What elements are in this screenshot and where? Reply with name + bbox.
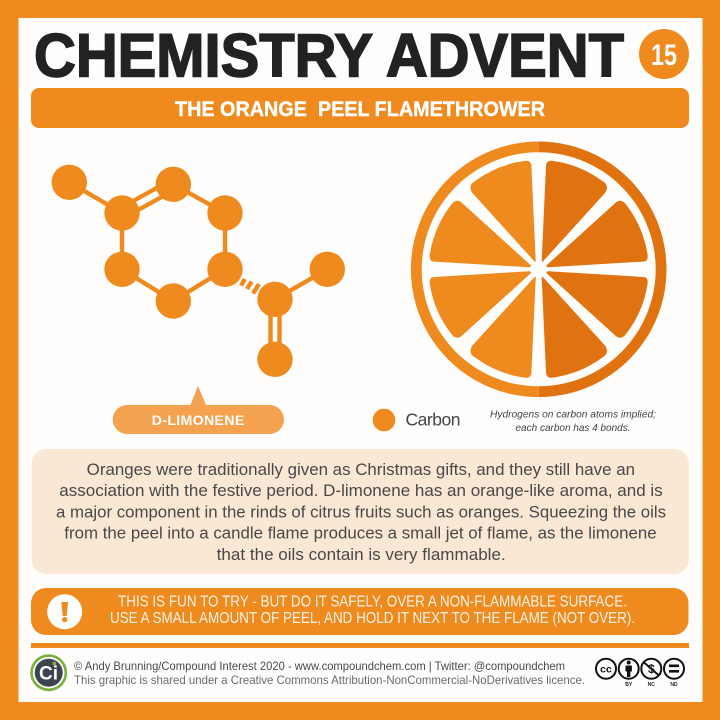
icon: exclamation mark xyxy=(47,594,82,629)
icon: creative commons licence badges: BY xyxy=(625,682,633,688)
footer credits xyxy=(74,659,585,687)
panel: description text: from the peel into a candle flame produces a small jet of flame, as the limonene xyxy=(64,525,657,543)
note: implied hydrogens: each carbon has 4 bonds. xyxy=(516,422,630,434)
icon: creative commons licence badges xyxy=(596,659,684,688)
panel: description text: that the oils contain is very flammable. xyxy=(217,546,506,564)
day number badge: 15 xyxy=(651,39,677,72)
warning banner: THIS IS FUN TO TRY - BUT DO IT SAFELY, OVER A NON-FLAMMABLE SURFACE. xyxy=(118,594,627,611)
icon: creative commons licence badges: NC xyxy=(648,682,655,688)
footer credits: © Andy Brunning/Compound Interest 2020 - www.compoundchem.com | Twitter: @compoundchem xyxy=(74,659,565,673)
panel: description text: association with the festive period. D-limonene has an orange-like aroma, and is xyxy=(59,482,663,500)
footer credits: This graphic is shared under a Creative Commons Attribution-NonCommercial-NoDerivatives licence. xyxy=(74,673,585,687)
molecule: d-limonene xyxy=(52,165,345,377)
day number badge xyxy=(639,29,689,79)
warning banner: USE A SMALL AMOUNT OF PEEL, AND HOLD IT NEXT TO THE FLAME (NOT OVER). xyxy=(110,610,635,627)
panel: description text: a major component in the rinds of citrus fruits such as oranges. Squeezing the oils xyxy=(56,504,666,522)
molecule name label: D-LIMONENE xyxy=(152,412,244,428)
subtitle banner xyxy=(31,88,689,128)
warning banner xyxy=(31,588,688,635)
panel: description text xyxy=(32,449,689,574)
panel: description text: Oranges were traditionally given as Christmas gifts, and they still have an xyxy=(87,461,635,479)
icon: creative commons licence badges: ND xyxy=(670,682,678,688)
legend: carbon xyxy=(373,409,460,431)
logo: compound interest xyxy=(30,654,67,691)
molecule name label xyxy=(113,386,284,434)
logo: compound interest: Ci xyxy=(39,664,58,684)
icon: creative commons licence badges: $ xyxy=(648,662,655,676)
icon: creative commons licence badges: cc xyxy=(600,664,612,676)
subtitle banner: THE ORANGE PEEL FLAMETHROWER xyxy=(175,97,545,121)
title: CHEMISTRY ADVENT xyxy=(34,22,624,90)
legend: carbon: Carbon xyxy=(406,410,460,430)
note: implied hydrogens: Hydrogens on carbon atoms implied; xyxy=(490,408,656,420)
orange slice illustration xyxy=(411,141,666,397)
